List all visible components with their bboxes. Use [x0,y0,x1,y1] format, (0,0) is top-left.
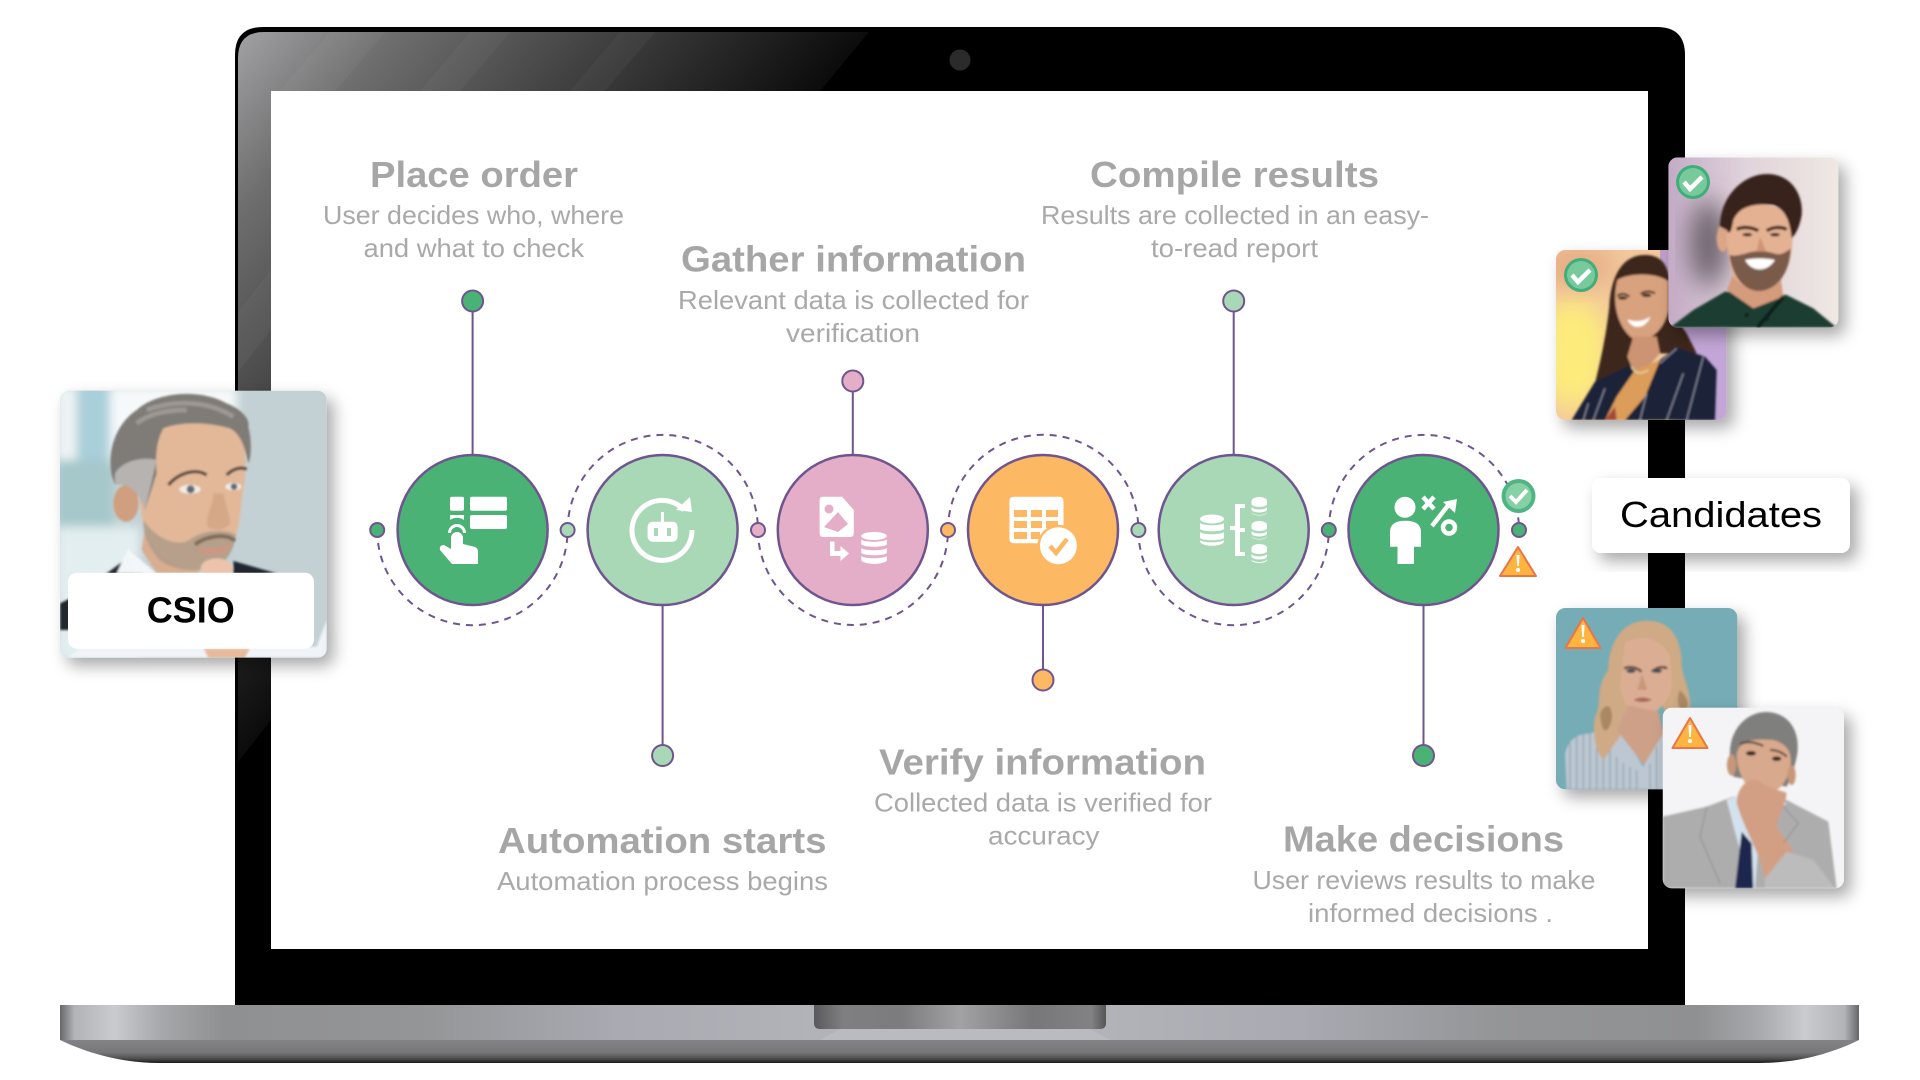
label: candidates: Candidates [1620,494,1822,535]
text: verify information [874,742,1212,850]
text: place order: and what to check [364,233,585,263]
text: place order: User decides who, where [323,200,624,230]
text: gather information: Gather information [681,238,1026,280]
text: automation starts [497,820,828,896]
icon: gray-haired man warning [1672,718,1708,748]
CSIO label [68,573,314,649]
card: flagged woman [1556,608,1737,789]
card: CSIO portrait [57,387,327,660]
text: automation starts: Automation starts [498,820,826,861]
text: gather information: verification [786,318,920,348]
stem end dots [462,290,1434,766]
text: compile results [1041,154,1429,263]
text: make decisions: Make decisions [1283,818,1564,860]
icon: man check [1676,165,1710,199]
small connector dots [370,523,1526,537]
camera [950,50,970,70]
text: place order [323,154,624,263]
text: make decisions [1252,818,1596,928]
text: automation starts: Automation process begins [497,866,828,896]
step 1: place order circle and icon [398,455,548,605]
laptop lid [235,27,1685,1010]
CSIO label: CSIO [147,590,235,630]
card: flagged man [1663,708,1844,888]
text: place order: Place order [370,154,578,195]
text: verify information: accuracy [988,820,1100,850]
status icon: warning [1500,547,1536,576]
laptop screen [271,91,1648,949]
text: gather information [678,238,1029,348]
status icon: check [1502,479,1536,513]
label: candidates [1592,478,1850,553]
process connectors [377,301,1519,755]
step 6: make decisions circle and icon [1348,455,1498,605]
text: make decisions: User reviews results to make [1252,865,1596,895]
dashed arcs [377,435,1519,625]
card: candidate woman [1537,247,1730,422]
text: compile results: Compile results [1090,154,1379,195]
text: verify information: Verify information [879,742,1206,782]
stem lines [473,301,1424,755]
step 3: gather information circle and icon [778,455,928,605]
step 4: verify information circle and icon [968,455,1118,605]
step 5: compile results circle and icon [1159,455,1309,605]
text: make decisions: informed decisions . [1308,898,1553,928]
text: verify information: Collected data is verified for [874,788,1212,818]
screen glare [238,32,869,762]
icon: woman check [1564,258,1598,292]
icon: blonde warning [1566,618,1600,648]
laptop base [60,1005,1859,1063]
card: candidate man [1668,157,1838,328]
text: compile results: to-read report [1151,233,1319,263]
text: gather information: Relevant data is collected for [678,285,1029,315]
text: compile results: Results are collected in an easy- [1041,200,1429,230]
step 2: automation circle and icon [588,455,738,605]
